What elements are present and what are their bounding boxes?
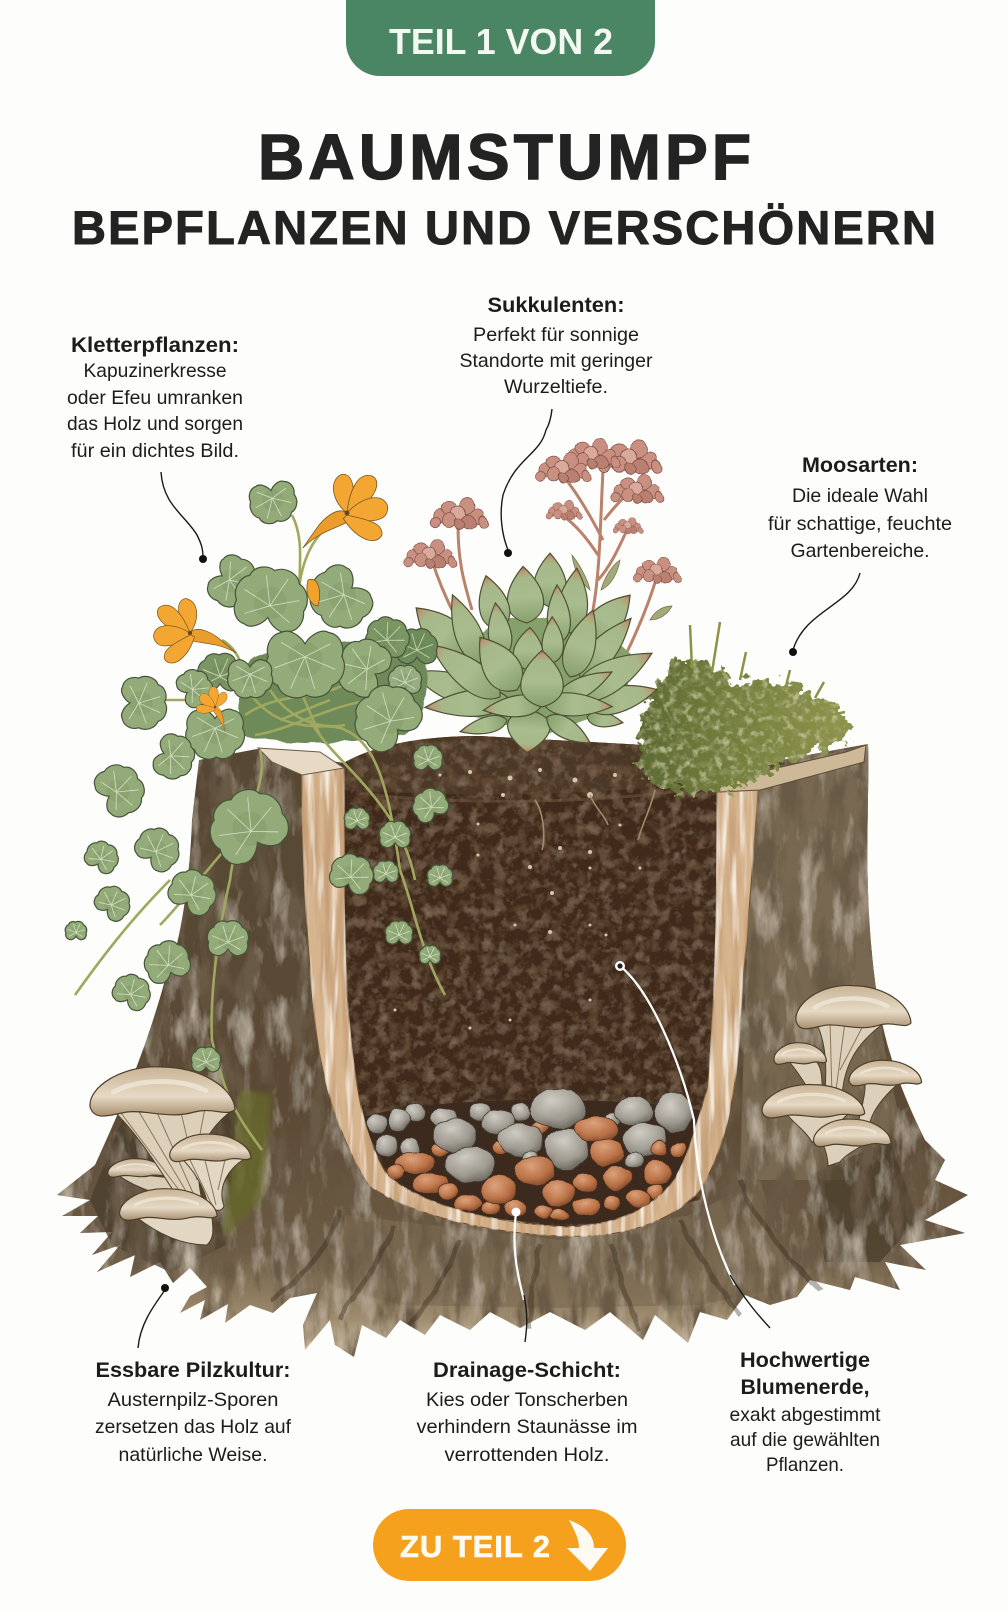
right trunk lighter bark — [740, 744, 900, 1180]
plant: succulent rosette — [404, 553, 660, 754]
mushrooms: left cluster — [90, 1067, 251, 1245]
callout: Kletterpflanzen: das Holz und sorgen — [67, 413, 243, 435]
leader line: Blumenerde — [615, 961, 770, 1328]
callout: Essbare Pilzkultur: Austernpilz-Sporen — [108, 1389, 278, 1411]
callout: Sukkulenten — [460, 294, 653, 398]
cut stump top: right — [717, 745, 866, 792]
callout: Drainage-Schicht: Kies oder Tonscherben — [426, 1389, 628, 1411]
leader line: Drainage — [512, 1208, 527, 1342]
callout: Drainage-Schicht — [416, 1359, 638, 1466]
callout: Hochwertige Blumenerde: auf die gewählten — [730, 1429, 880, 1451]
mushrooms: right cluster — [762, 985, 922, 1166]
callout: Moosarten: Die ideale Wahl — [792, 485, 928, 507]
leader line: Moosarten — [789, 573, 860, 656]
callout: Essbare Pilzkultur: natürliche Weise. — [118, 1444, 268, 1466]
icon: curved arrow down — [567, 1520, 608, 1571]
leader line: Sukkulenten — [501, 409, 552, 557]
plant: dark foliage behind nasturtium — [239, 642, 428, 742]
stump trunk and roots — [57, 744, 968, 1357]
callout: Drainage-Schicht: Drainage-Schicht: — [433, 1359, 621, 1382]
callout: Hochwertige Blumenerde: Pflanzen. — [766, 1454, 844, 1476]
callout: Sukkulenten: Sukkulenten: — [488, 294, 624, 317]
badge: Teil 1 von 2: TEIL 1 VON 2 — [389, 21, 613, 62]
title: BAUMSTUMPF — [258, 121, 751, 193]
illustration: planted tree stump cross-section — [57, 440, 968, 1357]
dark bark behind left mushrooms — [90, 1090, 240, 1272]
callout: Kletterpflanzen: für ein dichtes Bild. — [71, 440, 239, 462]
potting soil — [335, 736, 724, 1230]
callout: Sukkulenten: Standorte mit geringer — [460, 350, 653, 372]
plant: nasturtium stems — [75, 515, 445, 1150]
plant: moss — [639, 659, 850, 794]
title: BEPFLANZEN UND VERSCHÖNERN — [72, 201, 936, 254]
exposed light wood rim — [302, 757, 759, 1236]
central base bark — [330, 1180, 790, 1308]
callout: Moosarten: Moosarten: — [802, 454, 918, 477]
plant: nasturtium leaves — [65, 479, 453, 1072]
callout: Moosarten — [768, 454, 952, 562]
callout: Hochwertige Blumenerde: exakt abgestimmt — [730, 1404, 881, 1426]
leader line: Kletterpflanzen — [161, 472, 207, 563]
callout: Hochwertige Blumenerde: Hochwertige — [740, 1349, 870, 1372]
moss sprigs — [690, 622, 845, 715]
callout: Drainage-Schicht: verrottenden Holz. — [444, 1444, 610, 1466]
badge: Teil 1 von 2 — [346, 0, 655, 76]
button: Zu Teil 2: ZU TEIL 2 — [400, 1529, 550, 1564]
cut stump top: left — [258, 748, 344, 775]
callout: Sukkulenten: Wurzeltiefe. — [504, 376, 608, 398]
callout: Essbare Pilzkultur: Essbare Pilzkultur: — [96, 1359, 290, 1382]
moss on trunk base — [222, 1090, 272, 1240]
callout: Drainage-Schicht: verhindern Staunässe im — [416, 1416, 638, 1438]
callout: Hochwertige Blumenerde: Blumenerde, — [740, 1376, 870, 1399]
callout: Essbare Pilzkultur: zersetzen das Holz auf — [95, 1416, 292, 1438]
callout: Essbare Pilzkultur — [95, 1359, 292, 1466]
callout: Kletterpflanzen — [67, 334, 243, 462]
dark bark behind right mushrooms — [810, 1140, 918, 1262]
callout: Hochwertige Blumenerde — [730, 1349, 881, 1476]
plant: nasturtium flowers — [146, 474, 388, 731]
button: Zu Teil 2 — [373, 1509, 626, 1581]
callout: Kletterpflanzen: Kapuzinerkresse — [84, 360, 226, 382]
callout: Kletterpflanzen: oder Efeu umranken — [67, 387, 243, 409]
callout: Sukkulenten: Perfekt für sonnige — [473, 324, 639, 346]
callout: Kletterpflanzen: Kletterpflanzen: — [71, 334, 239, 357]
callout: Moosarten: Gartenbereiche. — [790, 540, 930, 562]
title — [72, 121, 936, 254]
callout: Moosarten: für schattige, feuchte — [768, 513, 952, 535]
drainage layer: gravel and clay shards — [360, 1089, 712, 1224]
plant: flowering succulent stems and blossoms — [403, 440, 681, 652]
leader line: Pilzkultur — [138, 1284, 169, 1348]
root cracks — [270, 1180, 820, 1330]
